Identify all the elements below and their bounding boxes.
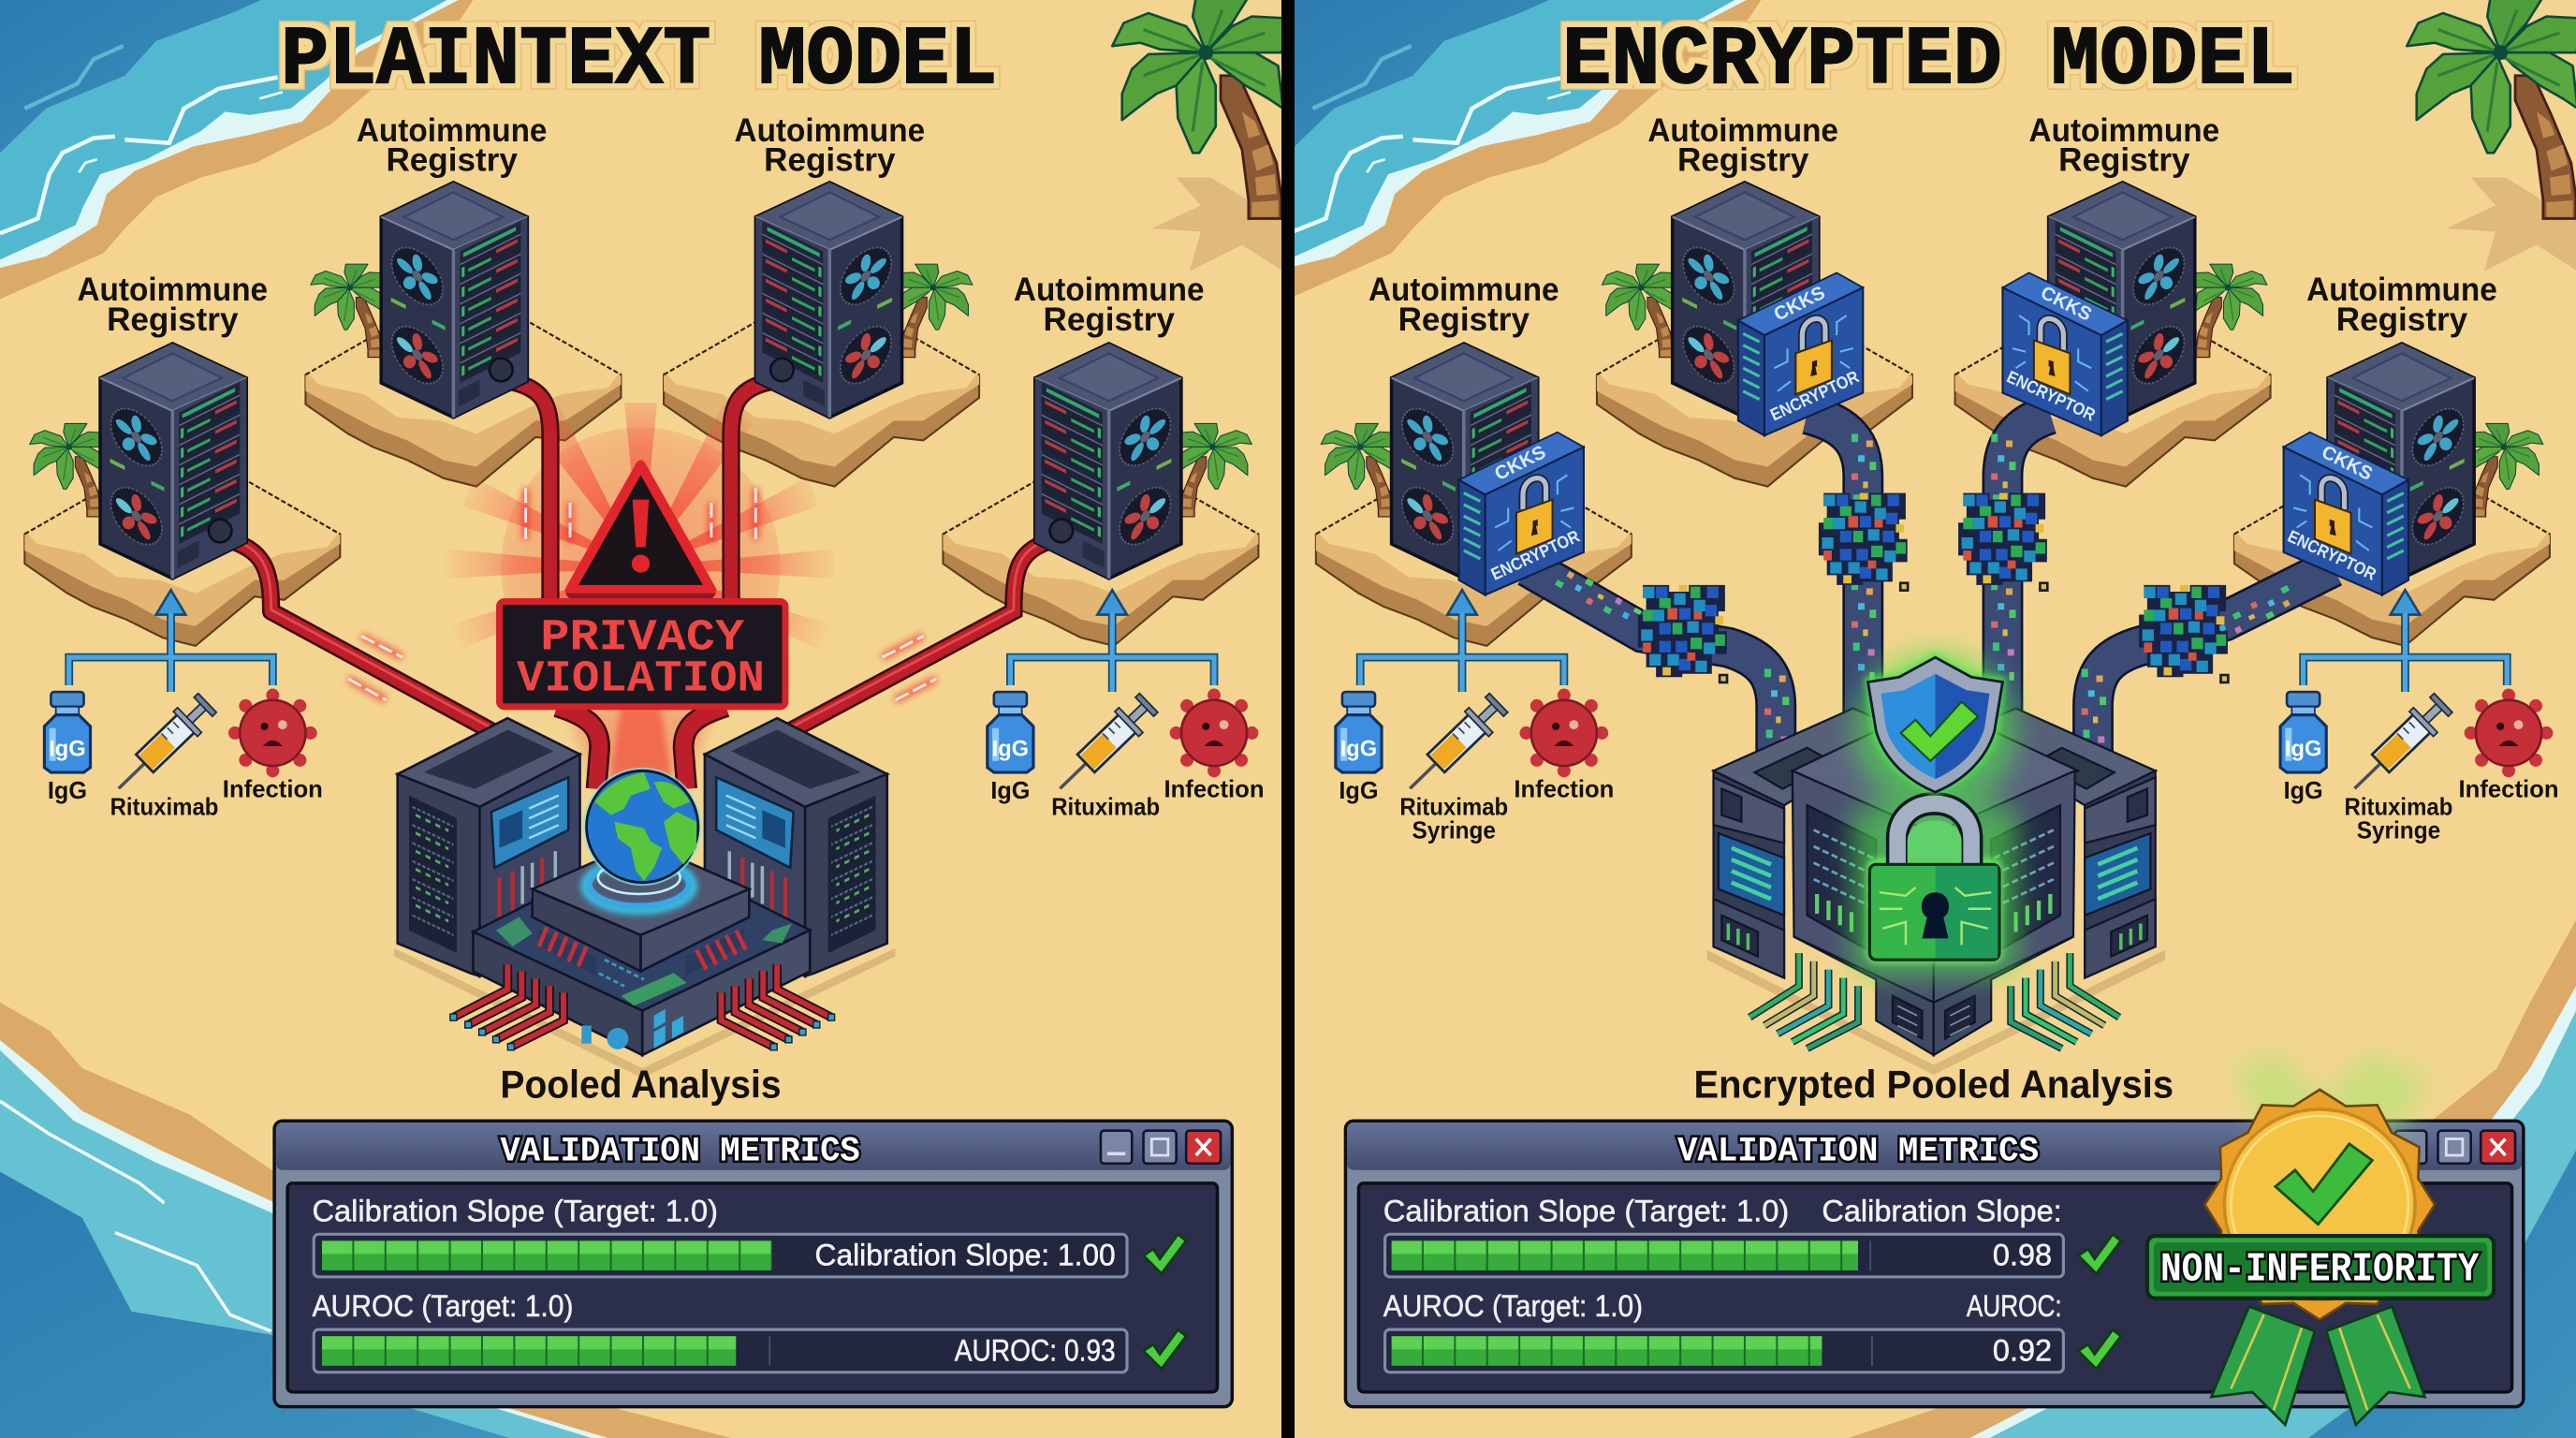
registry server 3	[2049, 183, 2195, 418]
central cabinet roof	[1793, 703, 2078, 833]
label: Rituximab Syringe	[2345, 795, 2452, 844]
central cabinet left face	[1793, 770, 1934, 1055]
small palm 4	[1178, 423, 1251, 517]
check mark	[1144, 1329, 1186, 1369]
island 1	[23, 480, 341, 647]
inner panel	[287, 1183, 1218, 1392]
window heading: VALIDATION METRICS	[1677, 1132, 2039, 1171]
small palm 1	[30, 423, 104, 517]
red cables: sign to hub	[557, 707, 726, 789]
icon: virus	[1519, 689, 1608, 777]
icon: syringe	[1048, 691, 1161, 800]
registry label 1	[77, 271, 268, 338]
pixel cloud 2	[1819, 493, 1909, 592]
base platform	[473, 846, 810, 1055]
icon: IgG vial	[2280, 692, 2326, 772]
check mark	[1144, 1234, 1186, 1273]
title bar	[1347, 1123, 2522, 1170]
encryptor box 2: ENCRYPTOR	[1767, 366, 1862, 424]
red cable: registry 4 to hub	[781, 537, 1055, 736]
red cable: registry 3 to sign	[731, 381, 772, 611]
icon: warning triangle	[565, 465, 716, 601]
title: PLAINTEXT MODEL	[281, 15, 997, 108]
sign: privacy violation: VIOLATION	[517, 654, 765, 704]
title bar	[276, 1123, 1231, 1170]
label: Infection: Infection	[1514, 776, 1614, 802]
upper platform	[533, 842, 749, 976]
registry label 2	[1647, 112, 1838, 179]
icon: globe	[583, 768, 701, 886]
right cabinet	[705, 718, 887, 976]
label: Infection: Infection	[2459, 776, 2559, 802]
encryptor box 2	[1738, 272, 1863, 435]
registry label 1: Registry	[1398, 301, 1530, 338]
arrow tree	[1010, 590, 1214, 692]
red cable: registry 2 to sign	[509, 381, 550, 611]
label: IgG: IgG	[990, 778, 1030, 804]
data inputs: left group	[1336, 590, 1614, 844]
red cable bundle left	[450, 964, 564, 1050]
sign: privacy violation	[500, 601, 785, 707]
metric label: auroc: AUROC (Target: 1.0)	[1383, 1289, 1643, 1323]
island 1	[1316, 444, 1632, 646]
caption: pooled analysis: Pooled Analysis	[500, 1063, 782, 1107]
registry label 2: Registry	[386, 142, 518, 179]
bar: auroc 0.92: 0.92	[1993, 1333, 2052, 1367]
icon: virus	[228, 689, 317, 777]
data inputs: right group	[988, 590, 1265, 821]
ocean: top-left corner	[0, 0, 473, 299]
encryptor box 3	[2002, 272, 2128, 435]
bar: auroc 0.92	[1385, 1329, 2063, 1372]
banner text: NON-INFERIORITY	[2160, 1246, 2480, 1293]
left side cabinet	[1714, 709, 1906, 977]
check mark	[2078, 1329, 2121, 1369]
pixel cloud 3	[1958, 493, 2049, 592]
metric name: auroc: AUROC:	[1967, 1289, 2062, 1323]
palm shadow	[2446, 178, 2576, 271]
metric name: calibration slope: Calibration Slope:	[1822, 1194, 2062, 1227]
label: IgG: IgG	[1339, 778, 1379, 804]
panel: plaintext model	[0, 0, 1288, 1438]
sparks on cables	[348, 488, 936, 700]
registry label 2: Autoimmune	[1647, 112, 1838, 149]
badge: non-inferiority medal	[2147, 1051, 2494, 1425]
medal body	[2204, 1090, 2435, 1320]
registry label 3	[735, 112, 925, 179]
encryptor box 1	[1459, 433, 1584, 594]
left cabinet	[398, 718, 580, 976]
label: Rituximab Syringe: Syringe	[2357, 817, 2440, 844]
encrypted data pipe 2	[1808, 414, 1863, 756]
ocean: top-left corner	[1288, 0, 1761, 299]
registry label 4: Autoimmune	[2306, 271, 2497, 308]
metric label: calibration slope: Calibration Slope (Target: 1.0)	[312, 1194, 718, 1227]
encryptor box 1: ENCRYPTOR	[1487, 526, 1583, 584]
central hub: pooled analysis servers	[394, 718, 896, 1078]
small palm 2	[311, 264, 385, 358]
encryptor box 3: ENCRYPTOR	[2004, 366, 2099, 424]
vial text: IgG	[1340, 737, 1377, 761]
bar: auroc 0.93: AUROC: 0.93	[955, 1333, 1116, 1367]
maximize button	[2438, 1131, 2471, 1164]
icon: IgG vial	[988, 692, 1033, 772]
island 4	[942, 481, 1260, 646]
medal check	[2276, 1144, 2372, 1225]
encryptor box 3: CKKS	[2037, 283, 2095, 326]
green cable bundle right	[2011, 953, 2119, 1049]
registry label 3: Registry	[2058, 142, 2190, 179]
bar: auroc 0.93	[314, 1329, 1127, 1372]
window heading: VALIDATION METRICS	[500, 1132, 860, 1171]
registry server 1	[1392, 344, 1538, 579]
encrypted data pipe 1	[1528, 567, 1776, 772]
window frame	[1345, 1121, 2524, 1407]
palm tree: top right	[2407, 0, 2576, 218]
central hub: encrypted analysis servers	[1707, 649, 2165, 1075]
check mark	[2078, 1234, 2121, 1273]
data inputs: right group	[2280, 590, 2559, 844]
label: Infection: Infection	[223, 776, 323, 802]
registry label 1	[1368, 271, 1559, 338]
label: Rituximab Syringe: Rituximab	[1399, 795, 1508, 821]
registry label 2: Registry	[1677, 142, 1809, 179]
sign: privacy violation: PRIVACY	[540, 613, 745, 663]
registry label 2: Autoimmune	[357, 112, 547, 149]
registry label 2	[357, 112, 547, 179]
icon: green padlock	[1866, 803, 2002, 963]
encryptor box 2: CKKS	[1771, 283, 1828, 326]
minimize button	[2395, 1131, 2426, 1164]
icon: IgG vial	[1336, 692, 1382, 772]
island 2	[304, 320, 622, 488]
icon: virus	[2465, 689, 2553, 777]
encryptor box 1: CKKS	[1491, 442, 1549, 485]
medal glow	[2231, 1051, 2432, 1134]
ocean: bottom-right corner	[1848, 920, 2576, 1438]
registry server 2	[381, 183, 527, 418]
icon: syringe	[2343, 691, 2455, 800]
title: ENCRYPTED MODEL	[1562, 15, 2295, 108]
ocean: bottom-left corner	[0, 1003, 731, 1438]
registry label 4: Registry	[1043, 301, 1175, 338]
green cable bundle left	[1749, 953, 1858, 1049]
small palm 3	[2193, 264, 2267, 358]
ribbon right	[2326, 1307, 2425, 1425]
icon: syringe	[1398, 691, 1511, 800]
small palm 3	[899, 264, 973, 358]
registry label 3: Registry	[764, 142, 896, 179]
bar: calibration slope 1.00	[314, 1234, 1127, 1277]
label: Rituximab: Rituximab	[1051, 795, 1160, 821]
palm shadow	[1151, 178, 1283, 271]
panel: encrypted model	[1288, 0, 2576, 1438]
encryptor box 4: CKKS	[2318, 442, 2376, 485]
vial text: IgG	[49, 737, 86, 761]
ribbon left	[2211, 1307, 2315, 1425]
bar: calibration slope 0.98	[1385, 1234, 2063, 1277]
central cabinet right face	[1934, 770, 2075, 1055]
registry server 4	[1035, 344, 1181, 579]
registry label 4: Registry	[2336, 301, 2468, 338]
data inputs: left group	[44, 590, 323, 821]
label: Infection: Infection	[1164, 776, 1265, 802]
arrow tree	[1360, 590, 1564, 692]
encrypted data pipe 4	[2093, 567, 2333, 772]
encryptor box 4	[2284, 433, 2408, 594]
right side cabinet	[1963, 709, 2156, 977]
caption: encrypted pooled analysis: Encrypted Pooled Analysis	[1694, 1063, 2174, 1107]
icon: shield with check	[1865, 653, 2006, 796]
bar: calibration slope 1.00: Calibration Slope: 1.00	[815, 1239, 1116, 1272]
window frame	[274, 1121, 1232, 1407]
minimize button	[1101, 1131, 1132, 1164]
island 3	[1955, 285, 2271, 487]
banner	[2147, 1236, 2494, 1299]
inner panel	[1358, 1183, 2512, 1392]
green glow	[1853, 649, 2017, 976]
registry label 3: Autoimmune	[735, 112, 925, 149]
palm tree: top right	[1112, 0, 1288, 218]
encrypted data pipe 3	[2002, 414, 2050, 756]
label: Rituximab Syringe	[1399, 795, 1508, 844]
island 4	[2234, 444, 2550, 646]
banner inner	[2154, 1242, 2487, 1292]
registry server 1	[100, 344, 246, 579]
close button	[1186, 1131, 1221, 1164]
registry server 4	[2328, 344, 2474, 579]
island 2	[1597, 285, 1912, 487]
pixel cloud 4	[2139, 585, 2230, 683]
label: Rituximab Syringe: Rituximab	[2345, 795, 2452, 821]
arrow tree	[69, 590, 272, 692]
metrics window	[1345, 1121, 2524, 1407]
close button	[2481, 1131, 2515, 1164]
registry label 1: Registry	[107, 301, 239, 338]
metric label: auroc: AUROC (Target: 1.0)	[312, 1289, 574, 1323]
registry label 4	[1014, 271, 1204, 338]
registry label 4	[2306, 271, 2497, 338]
red cable: registry 1 to hub	[227, 537, 501, 736]
red cable bundle right	[721, 964, 835, 1050]
metric label: calibration slope: Calibration Slope (Target: 1.0)	[1383, 1194, 1789, 1227]
bar: calibration slope 0.98: 0.98	[1993, 1239, 2052, 1272]
data bits on pipes	[1555, 433, 2297, 768]
label: IgG: IgG	[48, 778, 87, 804]
beach sand background	[0, 0, 1281, 1438]
registry label 3	[2029, 112, 2219, 179]
label: Rituximab: Rituximab	[110, 795, 218, 821]
registry server 3	[755, 183, 902, 418]
beach sand background	[1295, 0, 2576, 1438]
metrics window	[274, 1121, 1232, 1407]
label: Rituximab Syringe: Syringe	[1412, 817, 1496, 844]
warning rays glow	[446, 403, 835, 789]
maximize button	[1144, 1131, 1177, 1164]
icon: syringe	[107, 691, 219, 800]
pixel cloud 1	[1638, 585, 1728, 683]
encryptor box 4: ENCRYPTOR	[2285, 526, 2379, 584]
icon: virus	[1170, 689, 1258, 777]
registry label 3: Autoimmune	[2029, 112, 2219, 149]
registry label 1: Autoimmune	[77, 271, 268, 308]
label: IgG: IgG	[2284, 778, 2323, 804]
registry server 2	[1673, 183, 1819, 418]
icon: IgG vial	[44, 692, 91, 772]
island 3	[663, 322, 981, 488]
small palm 2	[1602, 264, 1676, 358]
small palm 4	[2469, 423, 2543, 517]
vial text: IgG	[992, 737, 1029, 761]
cyan ring	[585, 861, 694, 911]
vial text: IgG	[2285, 737, 2321, 761]
registry label 4: Autoimmune	[1014, 271, 1204, 308]
registry label 1: Autoimmune	[1368, 271, 1559, 308]
arrow tree	[2304, 590, 2507, 692]
small palm 1	[1321, 423, 1395, 517]
